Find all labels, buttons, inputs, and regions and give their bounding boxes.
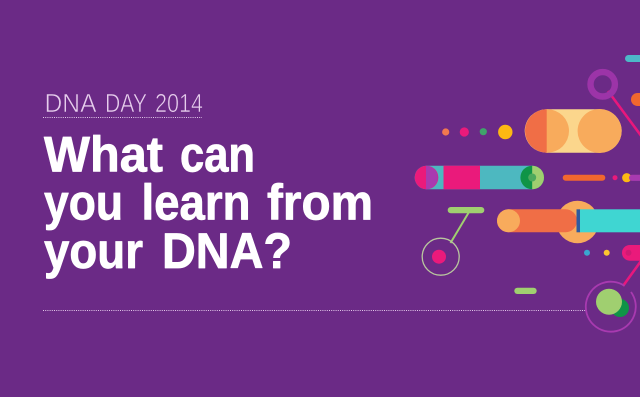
title: your — [44, 223, 143, 279]
capsule: pink teal green bar — [415, 166, 544, 189]
eyebrow: DNA Day 2014 — [44, 90, 203, 118]
icon: orange pill right edge — [631, 93, 640, 106]
title: can — [180, 126, 255, 182]
icon: yellow crescent with purple pill — [622, 173, 640, 182]
pink dot — [612, 175, 618, 180]
row of dots — [442, 125, 512, 139]
icon: pink pill, stem and dot — [622, 245, 640, 286]
dotted footer rule — [43, 310, 586, 312]
icon: pink stem and purple ring — [590, 72, 640, 137]
eyebrow: DNA Day 2014: DNA — [44, 90, 96, 118]
capsule: orange and cream — [525, 109, 622, 153]
capsule: orange teal bar with circle — [497, 201, 640, 243]
small yellow dot — [604, 250, 610, 256]
title: What — [44, 126, 163, 182]
title: learn — [142, 174, 250, 230]
title — [44, 126, 373, 279]
orange dash — [563, 175, 605, 181]
title: you — [44, 174, 123, 230]
eyebrow: DNA Day 2014: 2014 — [155, 90, 203, 118]
icon: green T with ring and pink dot — [422, 207, 484, 275]
title: from — [267, 174, 373, 230]
small blue dot — [584, 250, 590, 256]
icon: purple ring with green circles — [586, 282, 636, 332]
icon: teal pill top right — [625, 55, 640, 62]
title: DNA? — [162, 223, 292, 279]
green dash — [514, 288, 537, 294]
eyebrow: DNA Day 2014: DAY — [105, 90, 147, 118]
